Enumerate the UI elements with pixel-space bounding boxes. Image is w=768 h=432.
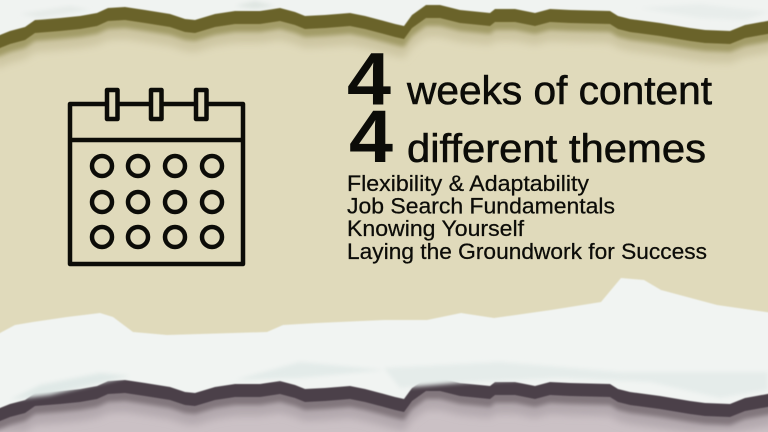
- heading: 4 different themes: [349, 95, 706, 178]
- heading: 4 weeks of content: 4: [347, 38, 391, 120]
- list of themes: [347, 171, 707, 264]
- cream paper panel: [0, 0, 768, 335]
- heading: 4 weeks of content: weeks of content: [406, 69, 712, 113]
- heading: 4 weeks of content: [347, 38, 712, 120]
- list of themes: Laying the Groundwork for Success: [347, 239, 707, 264]
- icon: calendar: [70, 90, 243, 264]
- heading: 4 different themes: 4: [349, 95, 393, 178]
- list of themes: Job Search Fundamentals: [347, 194, 615, 218]
- heading: 4 different themes: different themes: [407, 127, 706, 171]
- pink paper background: [0, 370, 768, 432]
- torn paper: top edge: [0, 0, 768, 69]
- torn paper: bottom edge: [0, 253, 768, 432]
- list of themes: Knowing Yourself: [347, 216, 525, 241]
- list of themes: Flexibility & Adaptability: [347, 171, 589, 196]
